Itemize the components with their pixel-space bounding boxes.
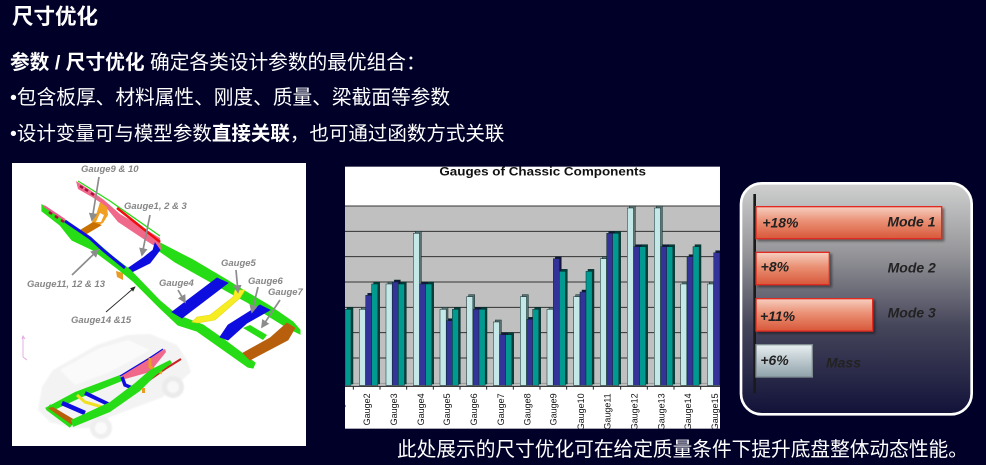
chart title: Gauges of Chassic Components bbox=[439, 166, 646, 179]
bar: Mode 3 bbox=[756, 299, 936, 331]
bar: Mode 1: +18% bbox=[762, 214, 799, 230]
gauge labels: Gauge4 bbox=[159, 278, 195, 289]
bars bbox=[345, 206, 722, 385]
vehicle body bbox=[38, 334, 191, 439]
chassis frame bbox=[42, 181, 300, 368]
axis labels: Gauge9 bbox=[549, 393, 559, 425]
axis labels: Gauge1 bbox=[335, 393, 345, 425]
gauge labels bbox=[27, 164, 304, 326]
title: 尺寸优化 bbox=[12, 5, 98, 29]
panel: chassis image bbox=[12, 163, 306, 446]
axis labels: Gauge10 bbox=[576, 393, 586, 430]
bar: Mass bbox=[756, 345, 861, 377]
bar: Mass: +6% bbox=[760, 352, 789, 368]
axis triad bbox=[22, 336, 27, 360]
axis labels: Gauge14 bbox=[683, 393, 693, 430]
bar: Mode 3: Mode 3 bbox=[888, 305, 936, 321]
gauge labels: Gauge14 &15 bbox=[71, 315, 132, 326]
axis labels: Gauge2 bbox=[362, 393, 372, 425]
text: bullet two: •设计变量可与模型参数直接关联，也可通过函数方式关联 bbox=[10, 123, 504, 145]
axis labels: Gauge3 bbox=[389, 393, 399, 425]
axis labels: Gauge13 bbox=[656, 393, 666, 430]
gauge labels: Gauge1, 2 & 3 bbox=[124, 201, 188, 212]
panel: performance change bars bbox=[741, 183, 972, 414]
gauge labels: Gauge7 bbox=[268, 287, 304, 298]
bar: Mass: Mass bbox=[826, 354, 861, 370]
gauge labels: Gauge9 & 10 bbox=[81, 164, 139, 175]
axis labels: Gauge7 bbox=[496, 393, 506, 425]
axis labels: Gauge8 bbox=[522, 393, 532, 425]
gauge arrows bbox=[72, 177, 280, 327]
bar: Mode 2: +8% bbox=[761, 259, 790, 275]
panel: bar chart of gauges bbox=[335, 166, 722, 430]
bar: Mode 2: Mode 2 bbox=[888, 260, 936, 276]
gauge labels: Gauge5 bbox=[221, 258, 257, 269]
bar: Mode 3: +11% bbox=[760, 308, 796, 324]
text: bullet one: •包含板厚、材料属性、刚度、质量、梁截面等参数 bbox=[10, 87, 450, 109]
text: definition: 参数 / 尺寸优化 确定各类设计参数的最优组合： bbox=[10, 52, 426, 74]
bar: Mode 1: Mode 1 bbox=[887, 214, 936, 230]
gauge labels: Gauge11, 12 & 13 bbox=[27, 279, 106, 290]
axis labels bbox=[335, 393, 720, 430]
axis labels: Gauge4 bbox=[416, 393, 426, 425]
axis labels: Gauge5 bbox=[442, 393, 452, 425]
gauge labels: Gauge6 bbox=[248, 276, 284, 287]
plot area bbox=[345, 206, 720, 390]
axis labels: Gauge11 bbox=[603, 393, 613, 430]
axis labels: Gauge6 bbox=[469, 393, 479, 425]
bar: Mode 2 bbox=[756, 252, 936, 285]
graphics layer bbox=[12, 163, 973, 446]
axis labels: Gauge15 bbox=[710, 393, 720, 430]
axis labels: Gauge12 bbox=[630, 393, 640, 430]
caption: 此处展示的尺寸优化可在给定质量条件下提升底盘整体动态性能。 bbox=[397, 439, 968, 461]
bar: Mode 1 bbox=[756, 207, 942, 239]
small chassis on vehicle bbox=[45, 349, 181, 427]
vertical axis bbox=[753, 194, 756, 393]
